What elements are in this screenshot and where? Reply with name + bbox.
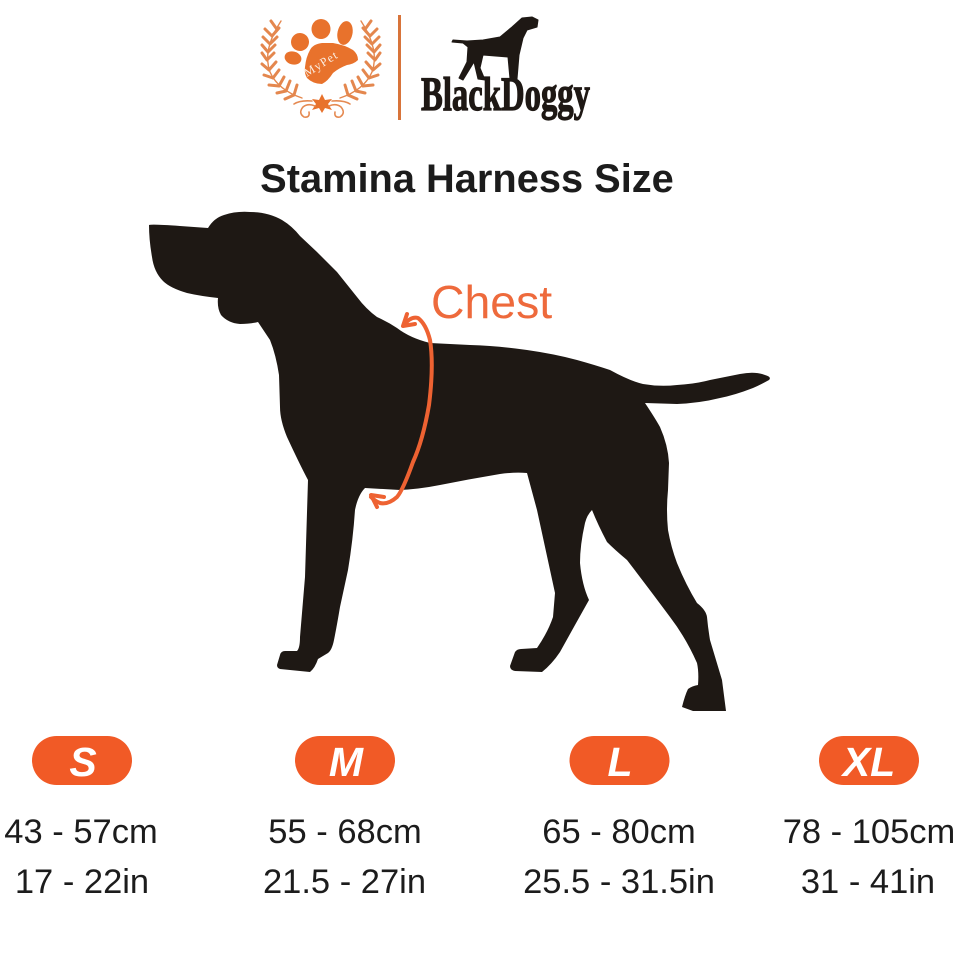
chest label: Chest — [431, 276, 552, 328]
dog silhouette — [149, 212, 770, 711]
size pill: L — [570, 736, 670, 785]
logo divider — [398, 15, 401, 120]
size L — [523, 736, 715, 901]
size S: 17 - 22in — [15, 863, 149, 901]
icon: paw toes — [283, 19, 355, 66]
chest measurement arrow — [371, 314, 432, 507]
MyPet text: MyPet — [301, 48, 341, 80]
size M — [263, 736, 426, 901]
size S — [4, 736, 158, 901]
icon: left laurel branch — [262, 21, 302, 99]
size pill: XL — [819, 736, 919, 785]
measurements: XL: 78 - 105cm — [783, 813, 955, 851]
measurements: L: 65 - 80cm — [542, 813, 696, 851]
BlackDoggy wordmark: BlackDoggy — [421, 68, 590, 121]
measurements: M: 55 - 68cm — [268, 813, 422, 851]
arrowhead: top — [403, 314, 415, 326]
size S: S — [69, 739, 97, 785]
size XL: 31 - 41in — [801, 863, 935, 901]
size L: L — [607, 739, 633, 785]
size pill: M — [295, 736, 395, 785]
icon: paw main pad — [305, 43, 358, 84]
size M: M — [329, 739, 364, 785]
icon: flower ornament — [294, 94, 350, 117]
size L: 25.5 - 31.5in — [523, 863, 715, 901]
icon: small dog silhouette — [452, 17, 538, 80]
size pill: S — [32, 736, 132, 785]
icon: right laurel branch — [340, 21, 380, 99]
logo: BlackDoggy — [421, 17, 590, 121]
title: Stamina Harness Size — [260, 157, 674, 201]
size XL — [783, 736, 955, 901]
size M: 21.5 - 27in — [263, 863, 426, 901]
arrowhead: bottom — [371, 495, 384, 507]
measurements: S: 43 - 57cm — [4, 813, 158, 851]
size XL: XL — [841, 739, 895, 785]
logo: MyPet — [262, 19, 380, 117]
